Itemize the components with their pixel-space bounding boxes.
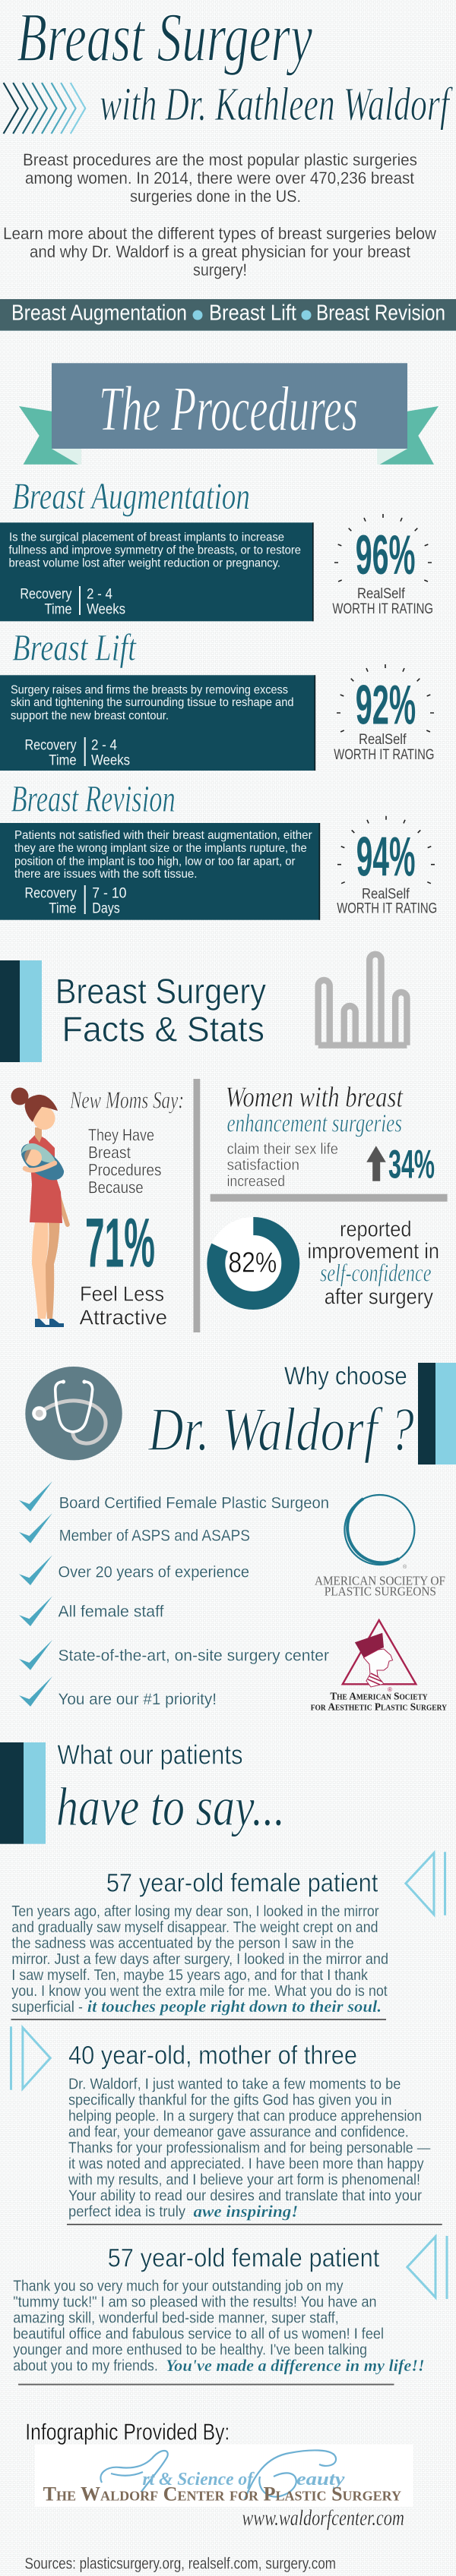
heading: Breast Augmentation: Breast Augmentation xyxy=(12,475,250,517)
intro text: surgeries done in the US. xyxy=(130,187,301,206)
panel: Breast Revision: Time xyxy=(49,901,77,917)
panel: Breast Revision: there are issues with the soft tissue. xyxy=(14,868,198,881)
testimonial: 57 year-old female patient: superficial - xyxy=(11,1999,83,2016)
testimonial: 57 year-old female patient xyxy=(13,2244,425,2375)
text: Feel Less Attractive: Feel Less xyxy=(80,1282,164,1305)
testimonial: 57 year-old female patient: it touches people right down to their soul. xyxy=(87,1997,382,2016)
text: Feel Less Attractive: Attractive xyxy=(79,1305,167,1329)
testimonial: 57 year-old female patient: and gradually saw myself disappear. The weight crept on and xyxy=(11,1919,378,1936)
panel: Breast Augmentation xyxy=(0,522,314,621)
rating: 94% xyxy=(337,816,437,917)
testimonial: 57 year-old female patient xyxy=(11,1869,388,2016)
text: reported improvement in self-confidence after surgery: improvement in xyxy=(307,1240,439,1264)
icon: chevrons xyxy=(4,83,85,134)
heading: Breast Surgery Facts & Stats: Facts & Stats xyxy=(62,1010,264,1049)
text: 71% xyxy=(85,1204,155,1282)
testimonial: 57 year-old female patient: You've made a difference in my life!! xyxy=(166,2356,425,2375)
testimonial: 40 year-old, mother of three: Dr. Waldorf, I just wanted to take a few moments to be xyxy=(68,2076,401,2093)
rating: 92% xyxy=(334,664,434,763)
panel: Breast Augmentation: Time xyxy=(44,601,71,617)
testimonial: 57 year-old female patient: the sadness was accentuated by the person I saw in the xyxy=(11,1935,354,1952)
intro text xyxy=(3,150,436,279)
panel: Breast Revision: Days xyxy=(92,901,120,917)
text: claim their sex life satisfaction increased: increased xyxy=(226,1173,285,1190)
panel: Breast Augmentation: fullness and improve symmetry of the breasts, or to restore xyxy=(9,544,301,557)
panel: Breast Augmentation: Is the surgical placement of breast implants to increase xyxy=(9,531,284,544)
panel: Breast Augmentation: 2 - 4 xyxy=(87,586,112,602)
illustration: mother holding baby xyxy=(11,1087,68,1327)
icon: stethoscope xyxy=(25,1367,122,1460)
testimonial: 57 year-old female patient: 57 year-old female patient xyxy=(108,2244,380,2273)
testimonial: 57 year-old female patient: mirror. Just a few days after surgery, I looked in the mirror and xyxy=(11,1951,388,1968)
heading: Breast Lift: Breast Lift xyxy=(12,626,137,668)
logo: American Society for Aesthetic Plastic Surgery xyxy=(311,1620,448,1713)
text: They Have Breast Procedures Because: Procedures xyxy=(88,1161,161,1180)
text: website: www.waldorfcenter.com xyxy=(242,2505,404,2530)
panel: Breast Lift: Recovery xyxy=(24,738,77,754)
panel: Breast Augmentation: breast volume lost after weight reduction or pregnancy. xyxy=(9,557,280,570)
checklist: You are our #1 priority! xyxy=(58,1691,217,1708)
rating: 96% xyxy=(332,514,433,617)
logo: The Waldorf Center for Plastic Surgery: eauty xyxy=(296,2470,345,2489)
testimonial: 57 year-old female patient: 57 year-old female patient xyxy=(106,1869,378,1898)
heading: What our patients: What our patients xyxy=(57,1739,243,1770)
band: procedure list xyxy=(0,299,456,331)
text: claim their sex life satisfaction increased: satisfaction xyxy=(226,1157,299,1174)
text: They Have Breast Procedures Because: They Have xyxy=(88,1125,154,1144)
intro text: among women. In 2014, there were over 470,236 breast xyxy=(25,169,414,188)
text: sources: Sources: plasticsurgery.org, realself.com, surgery.com xyxy=(24,2555,336,2572)
section bars: testimonials xyxy=(0,1742,46,1844)
testimonial: 57 year-old female patient: about you to my friends. xyxy=(13,2358,158,2375)
icon: left triangle xyxy=(406,1852,445,1915)
text: reported improvement in self-confidence after surgery: reported xyxy=(340,1217,412,1241)
panel: Breast Revision xyxy=(0,823,320,920)
panel: Breast Augmentation: Weeks xyxy=(87,601,125,617)
icon: right triangle xyxy=(11,2026,50,2090)
intro text: and why Dr. Waldorf is a great physician for your breast xyxy=(30,242,410,261)
logo: The Waldorf Center for Plastic Surgery: The Waldorf Center for Plastic Surgery xyxy=(43,2483,401,2505)
text: claim their sex life satisfaction increased xyxy=(226,1141,338,1190)
heading: Women with breast enhancement surgeries xyxy=(226,1081,404,1138)
section bars: facts xyxy=(0,960,42,1062)
checklist xyxy=(19,1481,329,1708)
testimonial: 40 year-old, mother of three: perfect idea is truly xyxy=(68,2204,185,2221)
checklist: Over 20 years of experience xyxy=(58,1564,249,1581)
logo: American Society of Plastic Surgeons: ® xyxy=(403,1564,407,1570)
panel: Breast Lift: 2 - 4 xyxy=(91,738,117,754)
text: They Have Breast Procedures Because xyxy=(88,1125,161,1197)
rating: 94%: RealSelf xyxy=(362,886,410,902)
testimonial: 57 year-old female patient: Thank you so very much for your outstanding job on my xyxy=(13,2278,344,2295)
panel: Breast Revision: Recovery xyxy=(24,886,77,902)
checklist: All female staff xyxy=(58,1603,164,1620)
heading: Breast Surgery Facts & Stats xyxy=(55,972,266,1049)
intro text: Breast procedures are the most popular plastic surgeries xyxy=(23,150,417,169)
text: Feel Less Attractive xyxy=(79,1282,167,1329)
panel: Breast Revision: they are the wrong implant size or the implants rupture, the xyxy=(14,842,307,855)
icon: left triangle xyxy=(407,2236,447,2299)
testimonial: 40 year-old, mother of three xyxy=(68,2041,430,2221)
text: reported improvement in self-confidence after surgery xyxy=(307,1217,439,1310)
panel: Breast Lift: Surgery raises and firms the breasts by removing excess xyxy=(11,683,288,696)
logo: American Society for Aesthetic Plastic Surgery: The American Society xyxy=(330,1691,428,1702)
donut chart: 82% xyxy=(207,1217,299,1310)
panel: Breast Lift: Time xyxy=(49,752,77,768)
logo: American Society for Aesthetic Plastic Surgery: ® xyxy=(388,1686,392,1693)
donut chart: 82%: 82% xyxy=(228,1247,277,1279)
intro text: surgery! xyxy=(193,260,247,279)
checklist: State-of-the-art, on-site surgery center xyxy=(58,1647,329,1665)
section bars: why choose xyxy=(418,1363,456,1465)
testimonial: 57 year-old female patient: amazing skill, wonderful bed-side manner, super staff, xyxy=(13,2310,339,2327)
panel: Breast Revision: position of the implant is too high, low or too far apart, or xyxy=(14,855,296,868)
text: New Moms Say: New Moms Say: xyxy=(69,1086,184,1113)
testimonial: 40 year-old, mother of three: and fear, your demeanor gave assurance and confidence. xyxy=(68,2124,409,2141)
panel: Breast Lift: support the new breast contour. xyxy=(11,709,169,722)
icon: bar chart xyxy=(318,954,407,1045)
banner: The Procedures xyxy=(19,363,439,465)
logo: The Waldorf Center for Plastic Surgery xyxy=(35,2445,413,2507)
text: They Have Breast Procedures Because: Because xyxy=(88,1178,144,1197)
icon: up arrow xyxy=(366,1146,386,1181)
testimonial: 57 year-old female patient: beautiful office and fabulous service to all of us women! I feel xyxy=(13,2326,384,2343)
panel: Breast Lift xyxy=(0,675,315,771)
testimonial: 57 year-old female patient: I saw myself. Ten, maybe 15 years ago, and for that I thank xyxy=(11,1967,369,1984)
panel: Breast Lift: Weeks xyxy=(91,752,130,768)
panel: Breast Augmentation: Recovery xyxy=(20,586,72,602)
rating: 92%: RealSelf xyxy=(359,732,407,748)
testimonial: 40 year-old, mother of three: 40 year-old, mother of three xyxy=(68,2041,357,2070)
testimonial: 57 year-old female patient: you. I know you went the extra mile for me. What you do is not xyxy=(11,1983,388,2000)
logo: American Society for Aesthetic Plastic Surgery: for Aesthetic Plastic Surgery xyxy=(311,1701,448,1713)
logo: American Society of Plastic Surgeons: PLASTIC SURGEONS xyxy=(325,1584,436,1599)
text: reported improvement in self-confidence after surgery: after surgery xyxy=(325,1285,433,1310)
checklist: Member of ASPS and ASAPS xyxy=(59,1527,250,1544)
heading: Breast Revision: Breast Revision xyxy=(11,777,176,819)
title: Breast Surgery: Breast Surgery xyxy=(17,0,312,76)
testimonial: 57 year-old female patient: "tummy tuck!" I am so pleased with the results! You have an xyxy=(13,2294,377,2311)
text: Infographic Provided By: Infographic Provided By: xyxy=(25,2418,230,2445)
text: They Have Breast Procedures Because: Breast xyxy=(88,1143,131,1162)
testimonial: 40 year-old, mother of three: awe inspiring! xyxy=(193,2202,298,2221)
rating: 96%: RealSelf xyxy=(357,586,405,602)
heading: Breast Surgery Facts & Stats: Breast Surgery xyxy=(55,972,266,1011)
testimonial: 57 year-old female patient: younger and more enthused to be healthy. I've been talking xyxy=(13,2342,367,2359)
logo: The Waldorf Center for Plastic Surgery: rt & Science of xyxy=(143,2470,255,2489)
logo: American Society of Plastic Surgeons xyxy=(315,1495,445,1599)
panel: Breast Lift: skin and tightening the surrounding tissue to reshape and xyxy=(11,696,293,709)
heading: Women with breast enhancement surgeries: Women with breast xyxy=(226,1081,404,1113)
intro text: Learn more about the different types of breast surgeries below xyxy=(3,224,436,243)
testimonial: 40 year-old, mother of three: Your ability to read our desires and translate that into your xyxy=(68,2188,422,2205)
text: claim their sex life satisfaction increased: claim their sex life xyxy=(226,1141,338,1158)
panel: Breast Revision: Patients not satisfied with their breast augmentation, either xyxy=(14,829,312,842)
checklist: Board Certified Female Plastic Surgeon xyxy=(59,1495,329,1512)
band: procedure list: Breast Lift xyxy=(209,301,296,326)
heading: Why choose: Why choose xyxy=(284,1361,407,1389)
heading: have to say...: have to say... xyxy=(56,1777,285,1837)
testimonial: 57 year-old female patient: Ten years ago, after losing my dear son, I looked in the mirror xyxy=(11,1903,379,1920)
testimonial: 40 year-old, mother of three: specifically thankful for the gifts God has given you in xyxy=(68,2092,392,2109)
panel: Breast Revision: 7 - 10 xyxy=(92,886,126,902)
band: procedure list: Breast Augmentation xyxy=(11,301,187,326)
testimonial: 40 year-old, mother of three: with my results, and I believe your art form is phenomenal! xyxy=(68,2172,420,2189)
